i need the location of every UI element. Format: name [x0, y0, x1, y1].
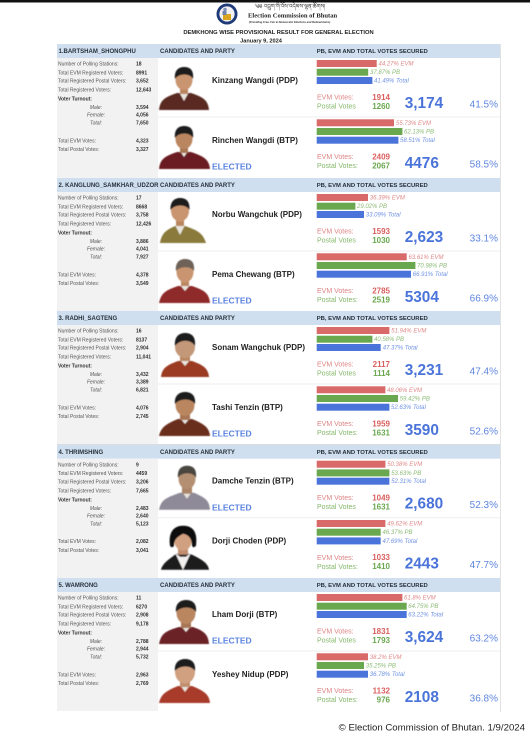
- section header: PB, EVM AND TOTAL VOTES SECURED: [317, 583, 428, 589]
- section header: [57, 578, 500, 592]
- voter statistics: [57, 459, 158, 579]
- voter statistics: 3,594: [136, 105, 149, 111]
- vote counts: 5304: [405, 289, 439, 306]
- voter statistics: 8137: [136, 337, 147, 343]
- voter statistics: 9,178: [136, 622, 149, 628]
- elected badge: ELECTED: [212, 162, 252, 172]
- voter statistics: 3,652: [136, 79, 149, 85]
- vote counts: 976: [377, 696, 391, 704]
- voter statistics: 4,041: [136, 247, 149, 253]
- voter statistics: Total EVM Votes:: [58, 672, 96, 678]
- bars: 53.63% PB: [391, 471, 421, 477]
- voter statistics: Total Registered Postal Voters:: [58, 479, 126, 485]
- name: Damche Tenzin (BTP): [212, 477, 294, 486]
- voter statistics: Total EVM Registered Voters:: [58, 604, 123, 610]
- voter statistics: 4,076: [136, 405, 149, 411]
- voter statistics: 3,389: [136, 380, 149, 386]
- vote counts: 2067: [372, 162, 391, 170]
- voter statistics: Number of Polling Stations:: [58, 62, 119, 68]
- vote counts: 3590: [405, 422, 439, 439]
- voter statistics: 3,549: [136, 281, 149, 287]
- bars: 47.37% Total: [383, 346, 418, 352]
- bars: 29.02% PB: [356, 204, 387, 210]
- bars: 52.31% Total: [391, 479, 427, 485]
- voter statistics: Total EVM Registered Voters:: [58, 337, 123, 343]
- candidate: Yeshey Nidup: [159, 653, 498, 706]
- commission name: Election Commission of Bhutan: [248, 12, 338, 20]
- vote counts: 66.9%: [470, 294, 498, 304]
- voter statistics: Male:: [90, 639, 103, 645]
- Dzongkha name: ༄༅ འབྲུག་གི་འོས་འདེམས་ལྷན་ཚོགས།: [255, 1, 326, 11]
- voter statistics: 6270: [136, 604, 147, 610]
- candidate: Sonam Wangchuk: [161, 327, 498, 379]
- vote counts: 47.4%: [470, 366, 498, 378]
- voter statistics: 4,056: [136, 113, 149, 119]
- voter statistics: Total EVM Votes:: [58, 138, 96, 144]
- section header: CANDIDATES AND PARTY: [160, 583, 235, 589]
- voter statistics: Total:: [90, 388, 103, 394]
- voter statistics: Male:: [90, 372, 103, 378]
- bars: 51.94% EVM: [391, 328, 426, 334]
- vote counts: Postal Votes:: [317, 297, 358, 304]
- section header: 2. KANGLUNG_SAMKHAR_UDZOR: [58, 183, 159, 189]
- vote counts: Postal Votes: [317, 638, 356, 644]
- bars: 36.39% EVM: [370, 196, 405, 202]
- candidate: Lham Dorji: [159, 594, 498, 646]
- bars: 66.91% Total: [413, 272, 448, 278]
- vote counts: EVM Votes:: [317, 94, 354, 102]
- bars: [317, 386, 430, 411]
- vote counts: Postal Votes:: [317, 564, 358, 571]
- bars: 62.13% PB: [404, 130, 434, 136]
- vote counts: EVM Votes:: [317, 628, 354, 636]
- name: Tashi Tenzin (BTP): [212, 403, 283, 412]
- voter statistics: Total Registered Voters:: [58, 622, 111, 628]
- portrait: [161, 333, 209, 377]
- name: Norbu Wangchuk (PDP): [212, 210, 302, 219]
- section header: 1.BARTSHAM_SHONGPHU: [58, 49, 136, 55]
- voter statistics: 2,788: [136, 639, 149, 645]
- vote counts: [317, 420, 498, 439]
- bars: 63.22% Total: [408, 612, 444, 618]
- voter statistics: 2,944: [136, 647, 149, 653]
- vote counts: EVM Votes:: [317, 154, 354, 161]
- vote counts: 52.6%: [470, 426, 498, 438]
- portrait: [160, 198, 206, 243]
- voter statistics: 3,758: [136, 213, 149, 219]
- voter statistics: 2,745: [136, 414, 149, 420]
- elected badge: ELECTED: [212, 636, 252, 646]
- section header: PB, EVM AND TOTAL VOTES SECURED: [317, 450, 428, 456]
- bars: 40.58% PB: [374, 337, 404, 343]
- bars: 37.87% PB: [370, 70, 400, 76]
- section header: PB, EVM AND TOTAL VOTES SECURED: [317, 183, 428, 189]
- vote counts: Postal Votes: [317, 370, 356, 378]
- name: Kinzang Wangdi (PDP): [212, 76, 298, 85]
- voter statistics: Total:: [90, 121, 103, 127]
- vote counts: [317, 553, 498, 573]
- vote counts: 36.8%: [470, 694, 498, 704]
- vote counts: Postal Votes:: [317, 697, 358, 704]
- voter statistics: Total Registered Postal Voters:: [58, 613, 126, 619]
- voter statistics: Total Registered Voters:: [58, 222, 111, 228]
- portrait: [159, 659, 210, 703]
- bars: [317, 119, 435, 144]
- vote counts: EVM Votes:: [317, 288, 354, 295]
- bars: 46.37% PB: [382, 530, 413, 536]
- voter statistics: 2,483: [136, 506, 149, 512]
- candidate: Tashi Tenzin: [159, 386, 498, 439]
- bars: 58.51% Total: [400, 138, 435, 144]
- name: Yeshey Nidup (PDP): [212, 670, 289, 679]
- section header: CANDIDATES AND PARTY: [160, 49, 235, 55]
- name: Rinchen Wangdi (BTP): [212, 136, 298, 145]
- voter statistics: 5,732: [136, 655, 149, 661]
- footer copyright: © Election Commission of Bhutan. 1/9/2024: [339, 722, 526, 734]
- panel: constituency 4: [57, 445, 500, 579]
- section header: 5. WAMRONG: [58, 583, 98, 589]
- vote counts: Postal Votes: [317, 238, 356, 244]
- candidate: Kinzang Wangdi: [159, 60, 498, 112]
- voter statistics: 6,821: [136, 388, 149, 394]
- voter statistics: 2,908: [136, 613, 149, 619]
- vote counts: 33.1%: [470, 234, 498, 244]
- section header: [57, 178, 500, 192]
- bars: [317, 60, 414, 84]
- voter statistics: 3,327: [136, 147, 149, 153]
- vote counts: 1033: [372, 553, 391, 562]
- bars: 63.61% EVM: [408, 255, 444, 261]
- name: Dorji Choden (PDP): [212, 537, 287, 546]
- voter statistics: Male:: [90, 105, 103, 111]
- vote counts: 63.2%: [470, 634, 498, 644]
- voter statistics: Total EVM Votes:: [58, 405, 96, 411]
- voter statistics: 4459: [136, 471, 147, 477]
- panel: constituency 3: [57, 311, 500, 445]
- vote counts: Postal Votes: [317, 104, 356, 110]
- voter statistics: 17: [136, 196, 142, 202]
- voter statistics: 7,927: [136, 255, 149, 261]
- portrait: [159, 600, 209, 644]
- vote counts: 2443: [405, 556, 439, 573]
- vote counts: 2,680: [405, 496, 443, 513]
- vote counts: [317, 686, 498, 706]
- bars: 49.62% EVM: [387, 522, 422, 528]
- name: Sonam Wangchuk (PDP): [212, 343, 305, 352]
- voter statistics: Total EVM Votes:: [58, 272, 96, 278]
- candidate: Dorji Choden: [161, 520, 498, 573]
- vote counts: 4476: [405, 155, 439, 172]
- vote counts: Postal Votes:: [317, 430, 358, 437]
- vote counts: [317, 93, 498, 112]
- voter statistics: Total Registered Voters:: [58, 355, 111, 361]
- voter statistics: Number of Polling Stations:: [58, 196, 119, 202]
- voter statistics: Total EVM Registered Voters:: [58, 471, 123, 477]
- name: Pema Chewang (BTP): [212, 270, 295, 279]
- bars: [317, 253, 448, 278]
- section header: CANDIDATES AND PARTY: [160, 316, 235, 322]
- voter statistics: [57, 192, 158, 311]
- vote counts: 2,623: [405, 229, 443, 246]
- voter statistics: 2,640: [136, 513, 149, 519]
- title: DEMKHONG WISE PROVISIONAL RESULT FOR GENERAL ELECTION: [183, 30, 374, 36]
- bars: 70.98% PB: [417, 264, 447, 270]
- vote counts: EVM Votes:: [317, 495, 354, 502]
- bars: [317, 520, 422, 545]
- header: commission logo and name: [216, 1, 338, 24]
- voter statistics: Total Postal Votes:: [58, 147, 99, 153]
- voter statistics: Total:: [90, 255, 103, 261]
- bars: 35.25% PB: [366, 664, 396, 670]
- vote counts: 1030: [372, 236, 391, 245]
- voter statistics: Female:: [87, 647, 106, 653]
- vote counts: [317, 152, 498, 172]
- voter statistics: 9: [136, 462, 139, 468]
- voter statistics: 18: [136, 62, 142, 68]
- vote counts: 1049: [372, 494, 391, 503]
- bars: 59.42% PB: [400, 396, 430, 402]
- vote counts: 2519: [372, 296, 391, 304]
- bars: 50.38% EVM: [387, 462, 422, 468]
- voter statistics: Total Postal Votes:: [58, 281, 99, 287]
- voter statistics: 4,323: [136, 138, 149, 144]
- voter statistics: 3,041: [136, 548, 149, 554]
- portrait: [159, 67, 209, 110]
- voter statistics: Number of Polling Stations:: [58, 462, 119, 468]
- voter statistics: Total Registered Postal Voters:: [58, 346, 126, 352]
- portrait: [161, 526, 209, 570]
- bars: [317, 653, 405, 678]
- vote counts: 1260: [372, 102, 391, 111]
- vote counts: 1593: [372, 227, 391, 236]
- portrait: [159, 259, 210, 303]
- bars: 36.78% Total: [370, 672, 405, 678]
- candidate: Rinchen Wangdi: [159, 119, 498, 172]
- candidate: Norbu Wangchuk: [160, 194, 498, 246]
- voter statistics: 7,665: [136, 488, 149, 494]
- vote counts: EVM Votes:: [317, 228, 354, 236]
- vote counts: 3,624: [405, 629, 444, 646]
- elected badge: ELECTED: [212, 296, 252, 306]
- vote counts: 1410: [372, 562, 391, 571]
- voter statistics: [57, 325, 158, 445]
- panel: constituency 1: [57, 44, 500, 178]
- bars: 55.73% EVM: [396, 121, 431, 127]
- section header: CANDIDATES AND PARTY: [160, 450, 235, 456]
- bars: 33.09% Total: [366, 212, 401, 218]
- vote counts: 52.3%: [470, 500, 498, 511]
- voter statistics: 12,426: [136, 222, 152, 228]
- portrait: [159, 466, 210, 510]
- vote counts: 1631: [372, 503, 391, 512]
- voter statistics: 11,041: [136, 355, 151, 361]
- voter statistics: 4,378: [136, 272, 149, 278]
- voter statistics: Total EVM Registered Voters:: [58, 70, 123, 76]
- voter statistics: 2,904: [136, 346, 149, 352]
- voter statistics: Total:: [90, 655, 103, 661]
- voter statistics: Total Registered Postal Voters:: [58, 213, 126, 219]
- voter statistics: 3,206: [136, 479, 149, 485]
- voter statistics: Voter Turnout:: [58, 497, 92, 503]
- voter statistics: 3,432: [136, 372, 149, 378]
- voter statistics: Total Postal Votes:: [58, 414, 99, 420]
- bars: 64.75% PB: [408, 604, 438, 610]
- vote counts: [317, 494, 498, 513]
- bars: 47.69% Total: [382, 539, 418, 545]
- voter statistics: Total Postal Votes:: [58, 548, 99, 554]
- voter statistics: 2,769: [136, 681, 149, 687]
- vote counts: EVM Votes:: [317, 421, 354, 428]
- vote counts: [317, 227, 498, 246]
- voter statistics: 16: [136, 329, 142, 335]
- vote counts: 1793: [372, 636, 391, 645]
- vote counts: [317, 360, 498, 379]
- vote counts: 1132: [373, 686, 391, 696]
- elected badge: ELECTED: [212, 429, 252, 439]
- bars: [317, 594, 444, 618]
- voter statistics: [57, 592, 158, 711]
- vote counts: 3,231: [405, 362, 444, 379]
- voter statistics: Total EVM Registered Voters:: [58, 204, 123, 210]
- vote counts: 2785: [372, 286, 391, 296]
- vote counts: 1831: [372, 627, 391, 636]
- voter statistics: Total Registered Postal Voters:: [58, 79, 126, 85]
- voter statistics: 12,643: [136, 88, 152, 94]
- voter statistics: 5,123: [136, 521, 149, 527]
- voter statistics: 2,082: [136, 539, 149, 545]
- voter statistics: Voter Turnout:: [58, 364, 92, 370]
- section header: [57, 44, 500, 58]
- bars: [317, 327, 426, 352]
- voter statistics: 7,650: [136, 121, 149, 127]
- voter statistics: 2,963: [136, 672, 149, 678]
- vote counts: 1631: [372, 428, 391, 438]
- vote counts: Postal Votes: [317, 504, 356, 511]
- voter statistics: 8991: [136, 70, 147, 76]
- vote counts: 2409: [372, 152, 391, 162]
- icon: commission logo: [216, 4, 238, 24]
- section header: PB, EVM AND TOTAL VOTES SECURED: [317, 49, 428, 55]
- voter statistics: Voter Turnout:: [58, 231, 92, 237]
- voter statistics: Voter Turnout:: [58, 97, 92, 103]
- section header: [57, 311, 500, 325]
- vote counts: EVM Votes:: [317, 555, 354, 562]
- portrait: [159, 392, 210, 436]
- bars: 38.2% EVM: [370, 655, 401, 661]
- vote counts: EVM Votes:: [317, 688, 354, 695]
- voter statistics: Female:: [87, 513, 106, 519]
- section header: [57, 445, 500, 459]
- bars: 61.8% EVM: [404, 596, 436, 602]
- voter statistics: Number of Polling Stations:: [58, 329, 119, 335]
- vote counts: 3,174: [405, 95, 444, 112]
- vote counts: 41.5%: [470, 100, 498, 110]
- voter statistics: 3,886: [136, 239, 149, 245]
- vote counts: 1114: [373, 369, 391, 378]
- bars: 52.63% Total: [391, 405, 426, 411]
- voter statistics: Total:: [90, 521, 103, 527]
- voter statistics: Total Postal Votes:: [58, 681, 99, 687]
- name: Lham Dorji (BTP): [212, 610, 278, 619]
- section header: CANDIDATES AND PARTY: [160, 183, 235, 189]
- voter statistics: Voter Turnout:: [58, 631, 92, 637]
- bars: 44.27% EVM: [378, 62, 414, 68]
- portrait: [159, 126, 210, 169]
- voter statistics: Total Registered Voters:: [58, 488, 111, 494]
- bars: 48.06% EVM: [387, 388, 422, 394]
- section header: PB, EVM AND TOTAL VOTES SECURED: [317, 316, 428, 322]
- vote counts: 2108: [405, 689, 439, 706]
- voter statistics: Female:: [87, 247, 106, 253]
- vote counts: [317, 286, 498, 306]
- candidate: Pema Chewang: [159, 253, 498, 306]
- elected badge: ELECTED: [212, 502, 252, 512]
- candidate: Damche Tenzin: [159, 461, 498, 513]
- voter statistics: 11: [136, 596, 142, 602]
- voter statistics: [57, 58, 158, 178]
- voter statistics: Male:: [90, 239, 103, 245]
- voter statistics: Number of Polling Stations:: [58, 596, 119, 602]
- voter statistics: Female:: [87, 113, 106, 119]
- vote counts: 2117: [373, 360, 391, 369]
- commission tagline: (Providing Free, Fair & Democratic Elections and Referendums): [249, 20, 330, 24]
- panel: constituency 5: [57, 578, 500, 711]
- bars: [317, 194, 405, 218]
- date: January 9, 2024: [240, 39, 283, 45]
- bars: [317, 461, 427, 485]
- bars: 41.49% Total: [374, 78, 409, 84]
- vote counts: 47.7%: [470, 560, 498, 571]
- voter statistics: Total Registered Voters:: [58, 88, 111, 94]
- voter statistics: Total EVM Votes:: [58, 539, 96, 545]
- section header: 4. THRIMSHING: [58, 450, 104, 456]
- vote counts: 1914: [372, 93, 391, 102]
- voter statistics: Male:: [90, 506, 103, 512]
- section header: 3. RADHI_SAGTENG: [58, 316, 118, 322]
- panel: constituency 2: [57, 178, 500, 311]
- vote counts: 58.5%: [470, 160, 498, 170]
- vote counts: 1959: [372, 420, 391, 428]
- vote counts: Postal Votes:: [317, 163, 358, 170]
- vote counts: [317, 627, 498, 646]
- voter statistics: Female:: [87, 380, 106, 386]
- vote counts: EVM Votes:: [317, 362, 354, 368]
- voter statistics: 8668: [136, 204, 147, 210]
